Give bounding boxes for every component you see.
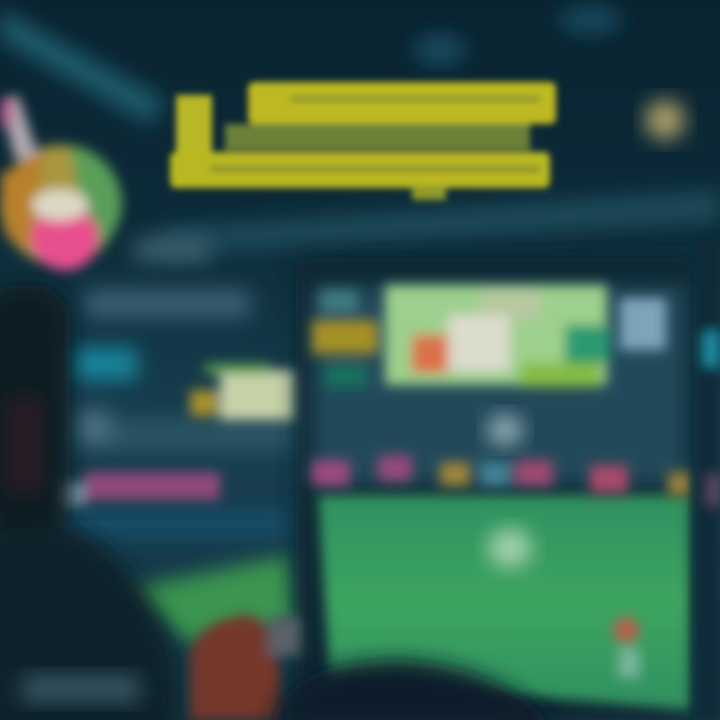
- pitch: [318, 495, 690, 710]
- screen: stadium view: [312, 285, 690, 710]
- caption bottom left: [22, 675, 140, 703]
- icon: colourful ball: [0, 95, 122, 270]
- crowd highlights: [487, 414, 523, 446]
- scoreboard: [312, 285, 666, 388]
- right edge strip: [695, 240, 720, 720]
- silhouette: viewer: [0, 285, 180, 720]
- ceiling beams: [0, 6, 720, 255]
- title: blurred yellow heading: [170, 82, 556, 200]
- ball on pitch: [488, 528, 532, 568]
- stands: [312, 285, 687, 485]
- flags band: [312, 455, 690, 496]
- left panel: small thumbnail: [190, 364, 298, 420]
- left pitch: [125, 555, 300, 645]
- badge: glowing dot top right: [645, 100, 685, 140]
- hand: [190, 615, 300, 720]
- head silhouette: [270, 660, 560, 720]
- left panel: blurred text lines: [60, 238, 300, 536]
- left panel: pink strip: [50, 472, 220, 506]
- player marker: [613, 617, 640, 678]
- screen frame: [296, 258, 696, 720]
